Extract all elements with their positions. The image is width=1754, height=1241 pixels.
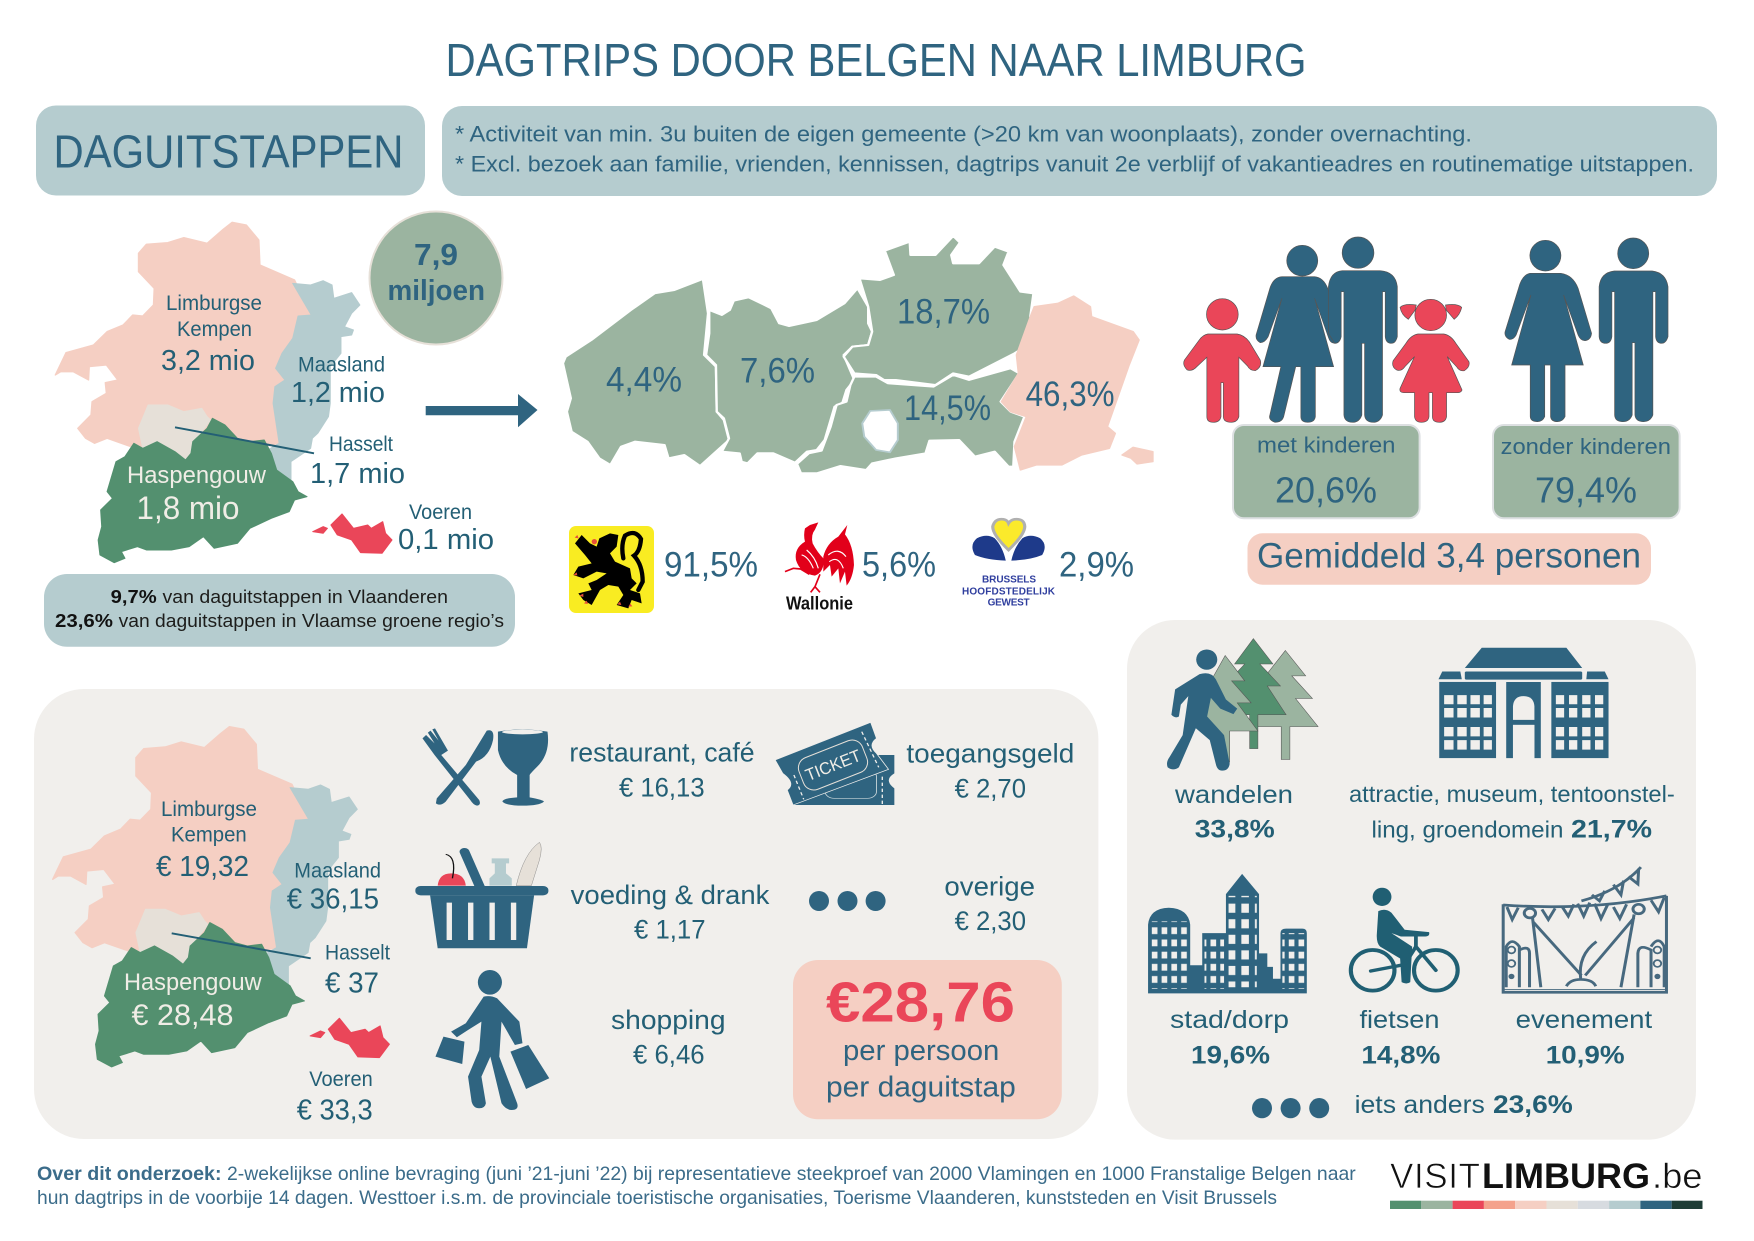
figure: boy (1184, 299, 1261, 422)
province: Antwerpen (844, 236, 1042, 385)
arrow (426, 394, 538, 427)
text: iets anders: iets anders (1355, 1091, 1485, 1119)
region: Hasselt: € 37 (325, 967, 379, 999)
region: Limburgse Kempen: 3,2 mio (161, 345, 255, 377)
text: fietsen: 14,8% (1361, 1041, 1440, 1070)
text: voeding en drank (571, 880, 770, 944)
text: attractie: 21,7% (1571, 815, 1652, 843)
region: Hasselt: 1,7 mio (310, 458, 405, 490)
map: origin by province (563, 236, 1153, 473)
logo: Visit Limburg: LIMBURG (1482, 1157, 1650, 1196)
text: overige: € 2,30 (955, 906, 1026, 936)
logo: Visit Limburg (1390, 1157, 1702, 1209)
province: Vlaams-Brabant: 14,5% (904, 389, 991, 428)
region: Maasland: Maasland (294, 860, 381, 883)
callout: market share (44, 574, 515, 647)
badge: 7,9 miljoen (370, 212, 502, 344)
stat: Brussel: 2,9% (1059, 546, 1134, 585)
callout: total spend: per persoon (843, 1035, 999, 1067)
text: stad/dorp: 19,6% (1191, 1041, 1270, 1070)
icon: Brussels logo: GEWEST (988, 598, 1030, 609)
footer: about the study (37, 1163, 1356, 1209)
text: evenement: 10,9% (1546, 1041, 1625, 1070)
panel: definition: * Activiteit van min. 3u buiten de eigen gemeente (>20 km van woonplaats), zonder overnachting. (455, 122, 1472, 147)
text: voeding en drank: voeding & drank (571, 880, 770, 910)
icon: shopping basket (415, 842, 548, 948)
callout: average party size: Gemiddeld 3,4 personen (1257, 536, 1641, 576)
map: spending per region (53, 727, 390, 1126)
region: Voeren (313, 501, 494, 556)
figure: girl (1393, 299, 1469, 422)
text: restaurant: restaurant, café (569, 738, 755, 768)
stat box: zonder kinderen: zonder kinderen (1501, 434, 1671, 459)
text: evenement (1516, 1006, 1652, 1070)
stat: Vlaanderen: 91,5% (664, 546, 758, 585)
panel: activities (1127, 620, 1696, 1140)
region: Maasland: € 36,15 (287, 883, 379, 915)
region: Limburgse Kempen: Kempen (177, 318, 252, 341)
title: DAGTRIPS DOOR BELGEN NAAR LIMBURG (446, 34, 1306, 86)
region: Voeren: Voeren (309, 1068, 373, 1091)
stat: Wallonië: 5,6% (862, 546, 936, 585)
region: Maasland (268, 281, 385, 482)
icon: Walloon rooster (785, 522, 854, 613)
province: Limburg (1001, 296, 1153, 470)
callout: market share: 23,6% (55, 610, 113, 631)
region: Limburgse Kempen (55, 222, 311, 450)
text: restaurant: € 16,13 (619, 773, 705, 803)
region: Maasland (265, 785, 381, 986)
icon: couple without children (1505, 238, 1668, 422)
region: Haspengouw: € 28,48 (132, 999, 234, 1032)
province: Limburg: 46,3% (1026, 375, 1115, 414)
region: Voeren: € 33,3 (297, 1094, 373, 1126)
icon: Brussels logo: BRUSSELS (982, 575, 1036, 586)
region: Maasland: Maasland (298, 354, 385, 377)
text: shopping: € 6,46 (633, 1039, 705, 1069)
panel: daguitstappen heading: DAGUITSTAPPEN (54, 126, 404, 178)
text: fietsen (1360, 1006, 1440, 1070)
icon: tickets (775, 722, 894, 805)
region: Limburgse Kempen: € 19,32 (156, 851, 249, 883)
icon: Flemish flag (569, 526, 654, 613)
text: iets anders (1355, 1091, 1573, 1119)
badge: 7,9 miljoen: 7,9 (414, 237, 458, 272)
stat box: met kinderen: 20,6% (1275, 470, 1377, 511)
region: Haspengouw: 1,8 mio (136, 490, 240, 526)
text: stad/dorp: stad/dorp (1170, 1006, 1289, 1034)
icon: Walloon rooster: Wallonie (786, 592, 853, 613)
province: West-Vlaanderen (563, 279, 729, 466)
text: voeding en drank: € 1,17 (634, 914, 706, 944)
text: iets anders: 23,6% (1493, 1091, 1573, 1119)
text: evenement: evenement (1516, 1006, 1652, 1034)
text: wandelen: wandelen (1174, 781, 1293, 809)
region: Hasselt: Hasselt (329, 433, 393, 456)
panel: definition (442, 106, 1717, 196)
logo: Visit Limburg: .be (1652, 1157, 1702, 1196)
leader line: Hasselt (175, 427, 314, 453)
figure: father (1328, 237, 1397, 422)
region: Limburgse Kempen (53, 727, 309, 954)
callout: total spend (793, 960, 1062, 1119)
province: Oost-Vlaanderen: 7,6% (740, 351, 815, 390)
region: Voeren: 0,1 mio (398, 524, 494, 556)
text: attractie (1349, 781, 1675, 843)
icon: Brussels logo: HOOFDSTEDELIJK (962, 586, 1056, 597)
region: Hasselt: Hasselt (325, 941, 390, 964)
region: Haspengouw: Haspengouw (124, 969, 262, 996)
region: Hasselt (139, 405, 405, 490)
text: toegangsgeld (906, 738, 1074, 804)
callout: total spend: €28,76 (826, 971, 1015, 1035)
panel: spending (34, 689, 1098, 1139)
icon: hiker and trees (1167, 639, 1318, 771)
stat box: zonder kinderen: 79,4% (1535, 470, 1637, 511)
icon: cyclist (1351, 888, 1458, 991)
footer: about the study: Over dit onderzoek: (37, 1163, 222, 1185)
panel: daguitstappen heading (36, 106, 425, 196)
icon: event stage (1503, 867, 1666, 992)
text: fietsen: fietsen (1360, 1006, 1440, 1034)
region: Haspengouw (98, 418, 307, 563)
province: Oost-Vlaanderen (706, 288, 872, 463)
callout: market share: van daguitstappen in Vlaamse groene regio’s (119, 610, 504, 631)
region: Haspengouw: Haspengouw (127, 462, 267, 489)
text: attractie: attractie, museum, tentoonstel- (1349, 781, 1675, 807)
text: toegangsgeld: € 2,70 (955, 774, 1026, 804)
text: wandelen (1174, 781, 1293, 843)
region: Voeren (297, 1018, 389, 1126)
icon: family with children (1184, 237, 1469, 422)
callout: market share: van daguitstappen in Vlaanderen (162, 586, 448, 607)
region: Haspengouw (96, 923, 304, 1067)
region: Maasland: 1,2 mio (291, 377, 385, 409)
icon: Brussels logo (962, 519, 1056, 609)
province: Vlaams-Brabant (797, 368, 1024, 473)
text: shopping: shopping (611, 1005, 726, 1035)
stat box: zonder kinderen (1493, 425, 1680, 518)
text: restaurant (569, 738, 755, 803)
badge: 7,9 miljoen: miljoen (388, 275, 485, 307)
province: Antwerpen: 18,7% (897, 292, 990, 331)
text: shopping (611, 1005, 726, 1069)
icon: cutlery and wine glass (422, 728, 548, 806)
figure: mother (1256, 245, 1340, 422)
icon: museum (1438, 648, 1609, 758)
icon: tickets: TICKET (803, 746, 864, 785)
text: stad/dorp (1170, 1006, 1289, 1070)
text: wandelen: 33,8% (1195, 815, 1275, 843)
icon: other dots (809, 891, 886, 911)
leader line: Hasselt (172, 933, 311, 958)
icon: city skyline (1148, 874, 1307, 993)
region: Limburgse Kempen: Limburgse (166, 292, 262, 315)
region: Limburgse Kempen: Kempen (171, 824, 247, 847)
text: attractie: ling, groendomein (1372, 816, 1563, 842)
panel: definition: * Excl. bezoek aan familie, vrienden, kennissen, dagtrips vanuit 2e verblijf of vakantieadres en routinematige uitstappen. (455, 152, 1694, 177)
callout: market share: 9,7% (111, 586, 157, 607)
text: overige: overige (944, 872, 1035, 902)
icon: other dots (1252, 1098, 1329, 1118)
map: Limburg visitors per region (55, 222, 494, 563)
icon: shopper (435, 970, 549, 1110)
region: Limburgse Kempen: Limburgse (161, 798, 257, 821)
stat box: met kinderen: met kinderen (1257, 433, 1396, 458)
text: toegangsgeld: toegangsgeld (906, 738, 1074, 768)
region: Voeren: Voeren (409, 501, 472, 524)
logo: Visit Limburg: VISIT (1390, 1157, 1480, 1196)
footer: about the study: hun dagtrips in de voorbije 14 dagen. Westtoer i.s.m. de provinciale toeristische organisaties, Toerisme Vlaanderen, kunststeden en Visit Brussels (37, 1187, 1277, 1209)
text: overige (944, 872, 1035, 936)
callout: total spend: per daguitstap (826, 1072, 1016, 1104)
footer: about the study: 2-wekelijkse online bevraging (juni ’21-juni ’22) bij representatieve steekproef van 2000 Vlamingen en 1000 Franstalige Belgen naar (227, 1163, 1356, 1185)
province: West-Vlaanderen: 4,4% (606, 361, 682, 400)
stat box: met kinderen (1233, 425, 1420, 518)
region: Hasselt (136, 909, 390, 999)
